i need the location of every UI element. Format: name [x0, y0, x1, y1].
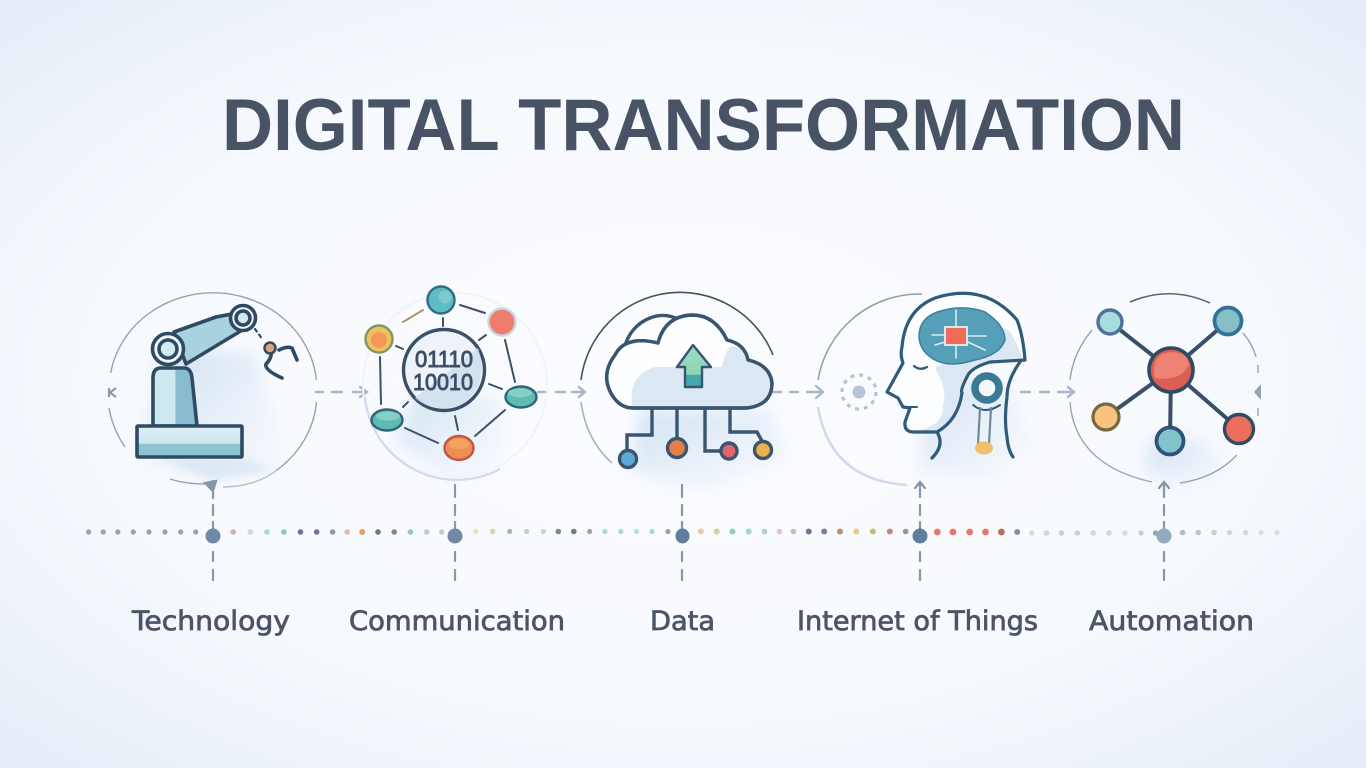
icon: binary hub: 01110 [415, 346, 473, 372]
icon: gear [842, 375, 876, 409]
icon: binary hub: 10010 [413, 369, 473, 395]
labels: Communication [349, 606, 565, 637]
labels: Technology [131, 606, 290, 637]
horizontal connector arrows [316, 386, 1074, 398]
column 4: Internet of Things [818, 293, 1030, 485]
shadow: head [920, 370, 1030, 480]
shadow: network [395, 385, 500, 482]
ring: hub [1070, 294, 1261, 483]
column 5: Automation [1070, 294, 1261, 485]
shadow: hub [1145, 440, 1225, 485]
column 2: Communication [363, 286, 547, 482]
labels: Data [650, 606, 715, 637]
timeline markers and vertical connectors [205, 481, 1172, 580]
icon: binary hub [404, 330, 484, 410]
labels: Internet of Things [797, 606, 1038, 637]
shadow: cloud [630, 410, 790, 490]
labels [131, 606, 1254, 637]
timeline dots [86, 528, 1280, 536]
shadow: robot [145, 345, 285, 482]
circuit nodes [620, 409, 772, 468]
column 1: Technology [109, 293, 316, 487]
icon: head [887, 293, 1025, 458]
ring: network [363, 293, 547, 480]
nodes [366, 286, 536, 460]
icon: robot arm [137, 306, 297, 480]
icon: hub and spoke network [1093, 308, 1254, 454]
links [380, 305, 515, 443]
icon: cloud [607, 315, 772, 408]
ring: robot [109, 293, 316, 487]
ring: head [818, 294, 922, 485]
column 3: Data [581, 292, 790, 490]
title: DIGITAL TRANSFORMATION [222, 85, 1185, 166]
labels: Automation [1089, 606, 1254, 637]
ring: cloud [581, 292, 773, 463]
